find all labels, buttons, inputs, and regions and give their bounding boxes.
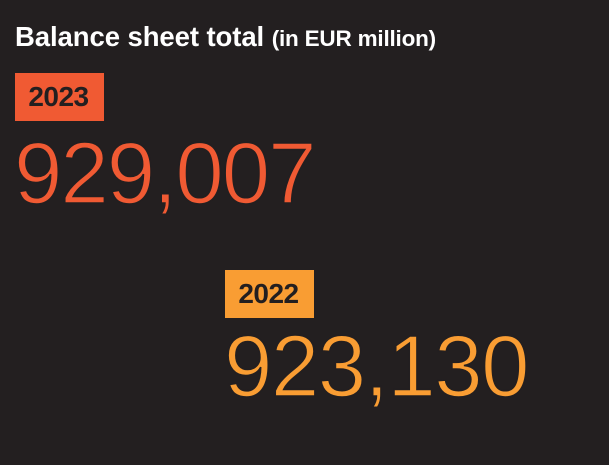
year tag: 2022	[225, 270, 314, 318]
value: 929,007: 929,007	[14, 125, 314, 222]
year tag: 2023: 2023	[28, 81, 89, 112]
title: Balance sheet total (in EUR million)	[15, 21, 436, 52]
value: 923,130: 923,130	[224, 318, 528, 415]
year tag: 2022: 2022	[238, 278, 299, 309]
year tag: 2023	[15, 73, 104, 121]
